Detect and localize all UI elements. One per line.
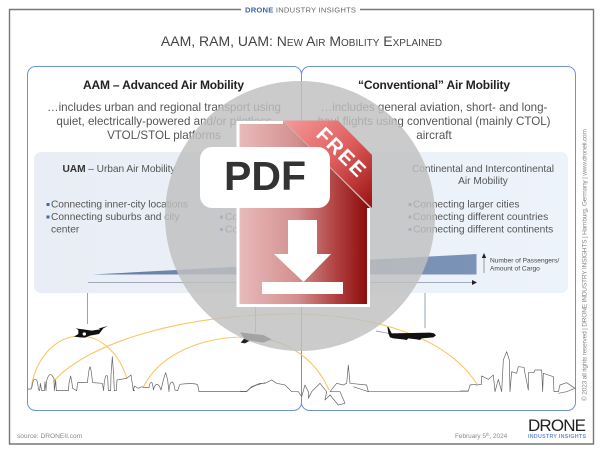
horizontal axis arrow (88, 280, 477, 285)
heading: conventional: “Conventional” Air Mobility (358, 78, 510, 92)
FREE ribbon (283, 120, 372, 208)
RAM column: Connecting suburbs (225, 212, 316, 223)
AAM description: quiet, electrically-powered and/or pilotless (56, 115, 272, 128)
continental column: Connecting different countries (413, 212, 548, 223)
overlay disc (165, 81, 435, 351)
heading: AAM: AAM – Advanced Air Mobility (83, 78, 244, 92)
vertical copyright: © 2023 all rights reserved | DRONE INDUSTRY INSIGHTS | Hamburg, Germany | www.droneii.com (580, 128, 588, 401)
download tray (262, 282, 343, 294)
continental column: Continental and Intercontinental (412, 164, 554, 175)
date: th (486, 432, 490, 437)
panel: AAM box (28, 66, 302, 410)
axis label: Amount of Cargo (490, 266, 540, 272)
city skyline (28, 352, 575, 405)
UAM column (46, 164, 188, 236)
continental column: Connecting larger cities (413, 200, 519, 210)
date: February 5 (455, 433, 486, 440)
PDF label (200, 147, 330, 208)
growth wedge chart (92, 254, 476, 274)
UAM column: UAM – Urban Air Mobility (62, 164, 176, 175)
RAM column: RAM – Regional Air Mobility (235, 164, 362, 175)
vertical arrow (482, 253, 486, 273)
icon: airliner (376, 327, 436, 340)
icon: PDF download (200, 120, 372, 307)
title: AAM, RAM, UAM: New Air Mobility Explained (161, 33, 442, 49)
icon: small aircraft (240, 332, 272, 343)
header brand: DRONE INDUSTRY INSIGHTS (245, 6, 356, 14)
continental column: Air Mobility (458, 176, 509, 187)
continental column (408, 164, 554, 236)
logo: DRONE (528, 416, 586, 435)
conventional description (317, 101, 551, 142)
conventional description: aircraft (416, 129, 452, 142)
RAM column (220, 164, 362, 236)
panel: conventional box (302, 66, 576, 410)
RAM column: Connecting neighboring cities (225, 224, 359, 236)
source note: source: DRONEII.com (17, 433, 83, 440)
flight arcs (31, 314, 477, 390)
axis label (490, 258, 559, 272)
page (237, 121, 370, 307)
FREE text: FREE (311, 123, 370, 182)
logo tagline: INDUSTRY INSIGHTS (528, 434, 586, 440)
UAM column: center (51, 224, 80, 236)
axis label: Number of Passengers/ (490, 258, 559, 264)
conventional description: haul flights using conventional (mainly CTOL) (317, 115, 551, 128)
AAM description: VTOL/STOL platforms (107, 129, 221, 142)
panel: mobility categories (34, 152, 568, 293)
category connector lines (88, 293, 425, 333)
AAM description (47, 101, 281, 142)
icon: tiltrotor aircraft (74, 326, 108, 338)
download arrow (274, 220, 331, 282)
PDF text: PDF (224, 153, 306, 199)
conventional description: …includes general aviation, short- and long- (321, 101, 548, 114)
AAM description: …includes urban and regional transport using (47, 101, 281, 114)
continental column: Connecting different continents (413, 224, 553, 236)
UAM column: Connecting suburbs and city (51, 212, 180, 223)
UAM column: Connecting inner-city locations (51, 200, 188, 210)
date: , 2024 (489, 433, 508, 440)
